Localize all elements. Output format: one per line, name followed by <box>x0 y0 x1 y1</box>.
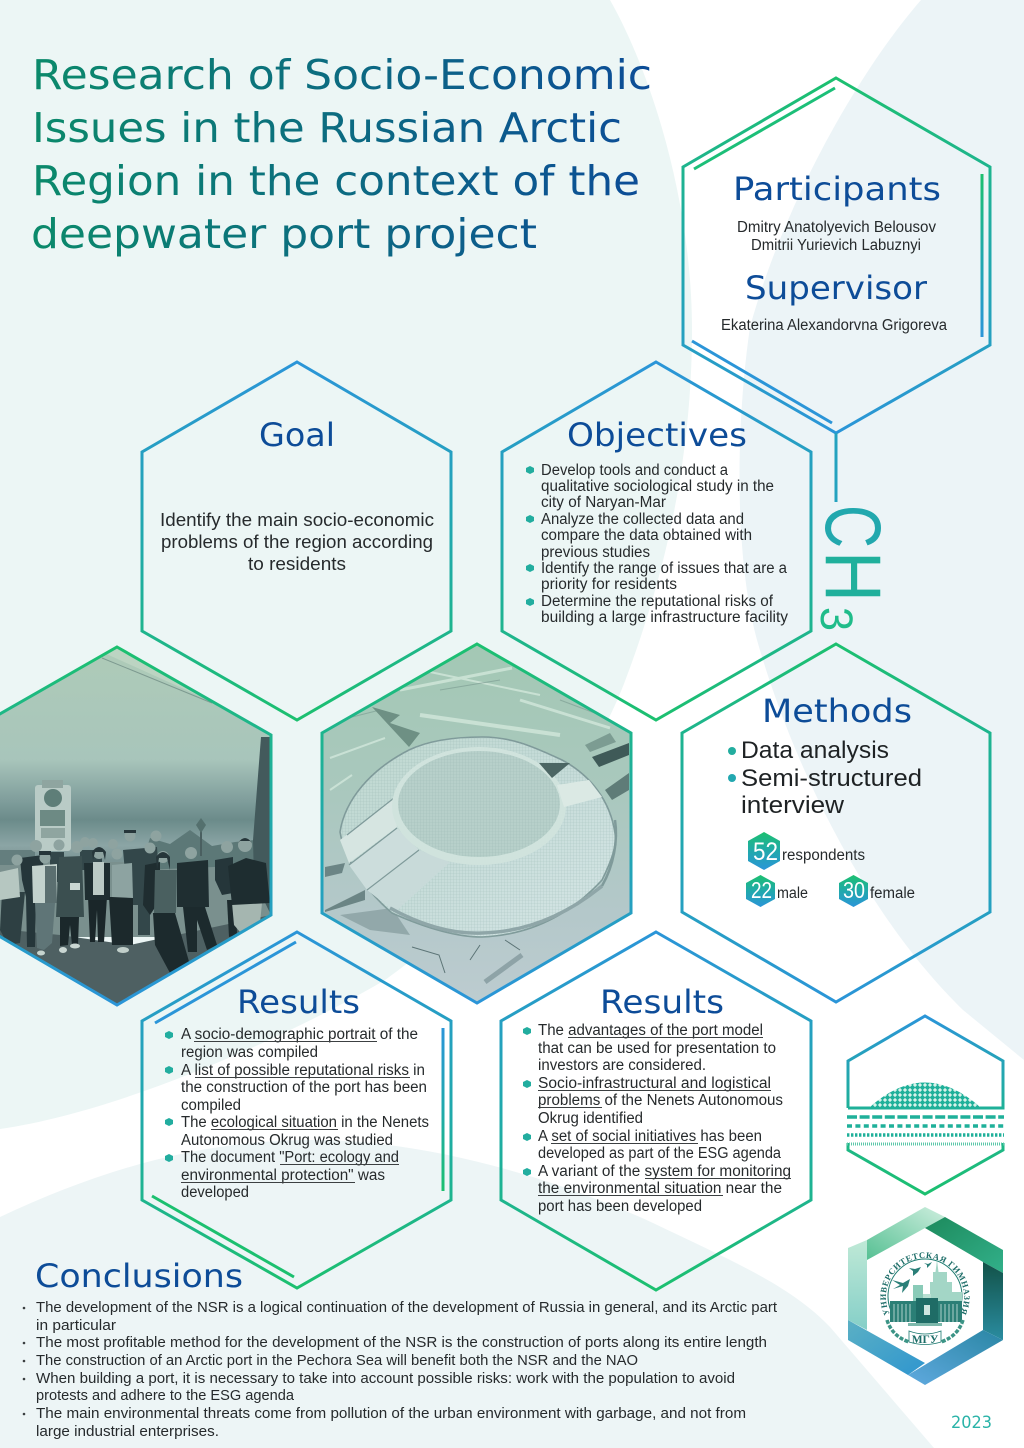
panel: goal: problems of the region according <box>161 531 433 552</box>
panel: objectives: building a large infrastructure facility <box>541 609 788 626</box>
panel: objectives: previous studies <box>541 544 650 561</box>
title <box>31 51 652 258</box>
panel: results left: developed <box>181 1184 249 1201</box>
panel: objectives: priority for residents <box>541 576 677 593</box>
photo: aerial view of the domed port model <box>320 640 635 1006</box>
panel: objectives: Objectives <box>567 416 747 454</box>
emblem laurels and ribbon with MGU letters <box>887 1320 963 1346</box>
background figures <box>50 847 160 935</box>
stat: 52 respondents: respondents <box>782 847 865 864</box>
icon: hexagon with dome and dashed waterline <box>847 1016 1004 1194</box>
panel: objectives: Identify the range of issues that are a <box>541 560 787 577</box>
year label: 2023 <box>951 1413 992 1432</box>
panel: objectives <box>502 362 811 720</box>
text block: conclusions list: large industrial enterprises. <box>36 1423 219 1440</box>
panel: objectives: Determine the reputational risks of <box>541 593 774 610</box>
panel: participants and supervisor: Dmitrii Yurievich Labuznyi <box>751 237 921 254</box>
panel: objectives: compare the data obtained with <box>541 527 752 544</box>
text block: conclusions list: The most profitable method for the development of the NSR is the construction of ports along its entire length <box>36 1334 767 1351</box>
panel: results right: Okrug identified <box>538 1110 643 1127</box>
text block: conclusions list: protests and adhere to the ESG agenda <box>36 1387 295 1404</box>
logo: university gymnasium emblem <box>848 1207 1003 1385</box>
panel: results left: the construction of the port has been <box>181 1079 427 1096</box>
person E <box>60 917 79 946</box>
panel: goal <box>142 362 451 720</box>
panel: results left: Results <box>237 983 360 1021</box>
text block: conclusions list: The construction of an Arctic port in the Pechora Sea will benefit both the NSR and the NAO <box>36 1352 638 1369</box>
panel: results right: A set of social initiatives has been <box>538 1128 762 1145</box>
panel: methods: Data analysis <box>741 737 889 764</box>
panel: participants and supervisor: Participants <box>733 170 941 208</box>
stat: 30 female: female <box>870 885 915 902</box>
person I <box>153 913 190 973</box>
stat: 22 male: 22 <box>751 877 772 903</box>
panel: results right: developed as part of the ESG agenda <box>538 1145 781 1162</box>
panel: results left: The ecological situation in the Nenets <box>181 1114 429 1131</box>
person K <box>227 900 237 937</box>
panel: results right: Results <box>600 983 724 1021</box>
emblem text ring: УНИВЕРСИТЕТСКАЯ ГИМНАЗИЯ <box>880 1252 970 1316</box>
connector and CH3 label <box>809 433 898 631</box>
connector and CH3 label: H <box>809 551 898 602</box>
panel: methods: Semi-structured <box>741 765 922 792</box>
panel: methods <box>682 644 990 1002</box>
panel: results right <box>501 932 811 1290</box>
person F <box>88 897 107 942</box>
person G <box>109 897 133 945</box>
connector and CH3 label: 3 <box>811 607 862 631</box>
heading: conclusions: Conclusions <box>35 1257 243 1295</box>
text block: conclusions list: The development of the NSR is a logical continuation of the development of Russia in general, and its Arctic part <box>36 1299 778 1316</box>
connector and CH3 label: C <box>809 505 898 548</box>
title: Research of Socio-Economic <box>32 51 652 99</box>
panel: results right: The advantages of the port model <box>538 1022 763 1039</box>
panel: participants and supervisor: Supervisor <box>745 269 928 307</box>
panel: results right: Socio-infrastructural and logistical <box>538 1075 771 1092</box>
stat: 30 female <box>839 875 915 907</box>
title: Issues in the Russian Arctic <box>32 104 622 152</box>
emblem drawing: university tower, wing and swallows <box>888 1259 962 1326</box>
person C <box>35 903 55 950</box>
stat: 52 respondents <box>748 832 865 870</box>
panel: participants and supervisor: Dmitry Anatolyevich Belousov <box>737 219 936 236</box>
panel: methods: interview <box>741 792 845 819</box>
stat: 30 female: 30 <box>843 877 865 903</box>
panel: results right: port has been developed <box>538 1198 702 1215</box>
panel: participants and supervisor <box>683 78 990 433</box>
text block: conclusions list: in particular <box>36 1317 116 1334</box>
panel: results left <box>142 932 451 1288</box>
panel: results left: environmental protection" was <box>181 1167 385 1184</box>
person J <box>183 907 217 952</box>
panel: results left: Autonomous Okrug was studied <box>181 1132 393 1149</box>
panel: results right: the environmental situation near the <box>538 1180 782 1197</box>
title: deepwater port project <box>31 210 537 258</box>
text block: conclusions list: When building a port, it is necessary to take into account possible risks: work with the population to avoid <box>36 1370 735 1387</box>
stat: 22 male: male <box>777 885 808 902</box>
panel: goal: Identify the main socio-economic <box>160 509 434 530</box>
panel: objectives: city of Naryan-Mar <box>541 494 666 511</box>
dome body <box>340 737 615 937</box>
panel: results right: problems of the Nenets Autonomous <box>538 1092 783 1109</box>
panel: results left: compiled <box>181 1097 241 1114</box>
panel: results right: A variant of the system for monitoring <box>538 1163 791 1180</box>
panel: results left: The document "Port: ecology and <box>181 1149 399 1166</box>
text block: conclusions list <box>23 1299 778 1440</box>
emblem laurels and ribbon with MGU letters: МГУ <box>912 1334 939 1346</box>
panel: objectives: qualitative sociological study in the <box>541 478 774 495</box>
panel: goal: Goal <box>259 416 335 454</box>
panel: results left: region was compiled <box>181 1044 318 1061</box>
title: Region in the context of the <box>32 157 640 205</box>
person L <box>232 903 262 932</box>
panel: results right: that can be used for presentation to <box>538 1040 776 1057</box>
person A <box>0 892 25 945</box>
panel: participants and supervisor: Ekaterina Alexandorvna Grigoreva <box>721 317 947 334</box>
heads <box>12 830 252 866</box>
panel: objectives: Analyze the collected data and <box>541 511 744 528</box>
person B <box>20 855 44 947</box>
photo: group of students at a road sign <box>0 640 280 1010</box>
panel: methods: Methods <box>762 692 912 730</box>
text block: conclusions list: The main environmental threats come from pollution of the urban environment with garbage, and not from <box>36 1405 746 1422</box>
stat: 52 respondents: 52 <box>753 838 778 866</box>
panel: objectives: Develop tools and conduct a <box>541 462 728 479</box>
panel: goal: to residents <box>248 553 346 574</box>
stat: 22 male <box>746 875 808 907</box>
panel: results right: investors are considered. <box>538 1057 706 1074</box>
panel: results left: A socio-demographic portrait of the <box>181 1026 418 1043</box>
panel: results left: A list of possible reputational risks in <box>181 1062 425 1079</box>
